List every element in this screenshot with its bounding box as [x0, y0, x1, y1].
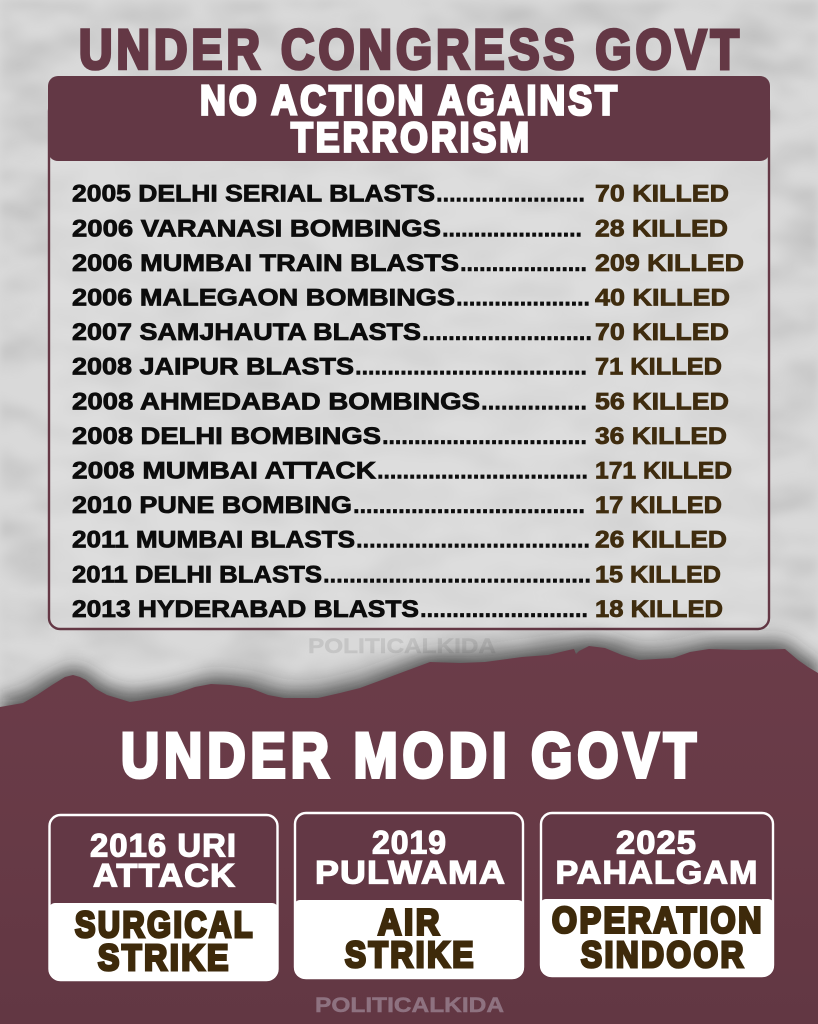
panel: congress era attacks list: [48, 76, 770, 629]
panel header: no action against terrorism: NO ACTION AGAINST: [200, 76, 620, 124]
row: 2008 jaipur blasts: ....................................: [355, 354, 587, 381]
row: 2011 delhi blasts: .........................................: [323, 561, 591, 588]
card: 2019 pulwama, air strike: STRIKE: [345, 934, 476, 975]
row: 2010 pune bombing: [72, 492, 722, 519]
row: 2008 mumbai attack: 171 KILLED: [595, 458, 732, 484]
row: 2007 samjhauta blasts: [72, 319, 729, 346]
card: 2025 pahalgam, operation sindoor: PAHALGAM: [556, 854, 758, 890]
row: 2006 malegaon bombings: [72, 284, 730, 312]
row: 2005 delhi serial blasts: 2005 DELHI SERIAL BLASTS: [72, 181, 435, 208]
card: 2019 pulwama, air strike: PULWAMA: [315, 854, 506, 890]
row: 2008 mumbai attack: 2008 MUMBAI ATTACK: [72, 458, 377, 484]
row: 2011 mumbai blasts: 26 KILLED: [595, 527, 727, 554]
title: under modi govt: UNDER MODI GOVT: [121, 721, 701, 791]
row: 2011 mumbai blasts: [72, 527, 727, 554]
row: 2006 malegaon bombings: .....................: [456, 284, 590, 312]
card: 2025 pahalgam, operation sindoor: [540, 813, 774, 977]
row: 2007 samjhauta blasts: 70 KILLED: [595, 319, 729, 346]
panel header: no action against terrorism: TERRORISM: [291, 114, 532, 160]
row: 2013 hyderabad blasts: [72, 596, 723, 623]
card: 2019 pulwama, air strike: 2019: [372, 824, 447, 860]
row: 2006 mumbai train blasts: 2006 MUMBAI TRAIN BLASTS: [72, 250, 459, 277]
watermark: upper politicalkida: POLITICALKIDA: [308, 635, 496, 658]
row: 2005 delhi serial blasts: 70 KILLED: [595, 181, 729, 208]
row: 2013 hyderabad blasts: ..........................: [420, 596, 588, 623]
row: 2013 hyderabad blasts: 2013 HYDERABAD BLASTS: [72, 596, 419, 623]
row: 2010 pune bombing: ....................................: [353, 492, 585, 519]
card: 2016 uri attack, surgical strike: 2016 URI: [90, 828, 237, 864]
row: 2005 delhi serial blasts: .......................: [436, 181, 585, 208]
row: 2011 mumbai blasts: 2011 MUMBAI BLASTS: [72, 527, 355, 554]
row: 2008 ahmedabad bombings: 2008 AHMEDABAD BOMBINGS: [72, 388, 480, 415]
watermark: lower politicalkida: POLITICALKIDA: [315, 994, 504, 1017]
row: 2006 mumbai train blasts: [72, 250, 744, 277]
row: 2006 varanasi bombings: [72, 215, 728, 242]
row: 2008 delhi bombings: 36 KILLED: [595, 423, 727, 450]
row: 2008 mumbai attack: [72, 458, 732, 484]
row: 2010 pune bombing: 17 KILLED: [595, 492, 722, 519]
row: 2008 jaipur blasts: [72, 354, 722, 381]
row: 2008 ahmedabad bombings: 56 KILLED: [595, 388, 729, 415]
card: 2016 uri attack, surgical strike: [49, 815, 278, 981]
row: 2006 varanasi bombings: 2006 VARANASI BOMBINGS: [72, 215, 441, 242]
row: 2006 malegaon bombings: 40 KILLED: [595, 284, 730, 312]
row: 2010 pune bombing: 2010 PUNE BOMBING: [72, 492, 352, 519]
row: 2008 ahmedabad bombings: [72, 388, 729, 415]
row: 2006 varanasi bombings: ......................: [442, 215, 582, 242]
card: 2016 uri attack, surgical strike: ATTACK: [93, 858, 236, 894]
row: 2006 mumbai train blasts: 209 KILLED: [595, 250, 744, 277]
row: 2007 samjhauta blasts: ..........................: [422, 319, 592, 346]
row: 2011 mumbai blasts: ....................................: [356, 527, 590, 554]
card: 2025 pahalgam, operation sindoor: SINDOOR: [581, 934, 746, 975]
row: 2008 mumbai attack: .................................: [377, 458, 588, 484]
card: 2016 uri attack, surgical strike: STRIKE: [98, 937, 231, 978]
row: 2011 delhi blasts: 15 KILLED: [595, 561, 721, 588]
row: 2008 ahmedabad bombings: ................: [481, 388, 587, 415]
row: 2008 delhi bombings: ................................: [382, 423, 587, 450]
row: 2007 samjhauta blasts: 2007 SAMJHAUTA BLASTS: [72, 319, 421, 346]
row: 2005 delhi serial blasts: [72, 181, 729, 208]
row: 2008 delhi bombings: [72, 423, 727, 450]
row: 2008 jaipur blasts: 2008 JAIPUR BLASTS: [72, 354, 354, 381]
row: 2006 varanasi bombings: 28 KILLED: [595, 215, 728, 242]
row: 2008 delhi bombings: 2008 DELHI BOMBINGS: [72, 423, 381, 450]
row: 2011 delhi blasts: 2011 DELHI BLASTS: [72, 561, 322, 588]
row: 2008 jaipur blasts: 71 KILLED: [595, 354, 722, 381]
card: 2025 pahalgam, operation sindoor: OPERATION: [552, 900, 764, 940]
row: 2006 malegaon bombings: 2006 MALEGAON BOMBINGS: [72, 284, 455, 312]
row: 2006 mumbai train blasts: ....................: [460, 250, 587, 277]
torn edge shadow: [0, 638, 818, 760]
panel header: no action against terrorism: [48, 76, 770, 161]
card: 2016 uri attack, surgical strike: SURGICAL: [75, 904, 255, 945]
card: 2019 pulwama, air strike: AIR: [378, 902, 442, 942]
row: 2013 hyderabad blasts: 18 KILLED: [595, 596, 723, 623]
card: 2019 pulwama, air strike: [294, 813, 524, 979]
row: 2011 delhi blasts: [72, 561, 721, 588]
maroon torn paper section: [0, 646, 818, 1024]
card: 2025 pahalgam, operation sindoor: 2025: [616, 824, 697, 860]
panel outline: [49, 100, 769, 629]
